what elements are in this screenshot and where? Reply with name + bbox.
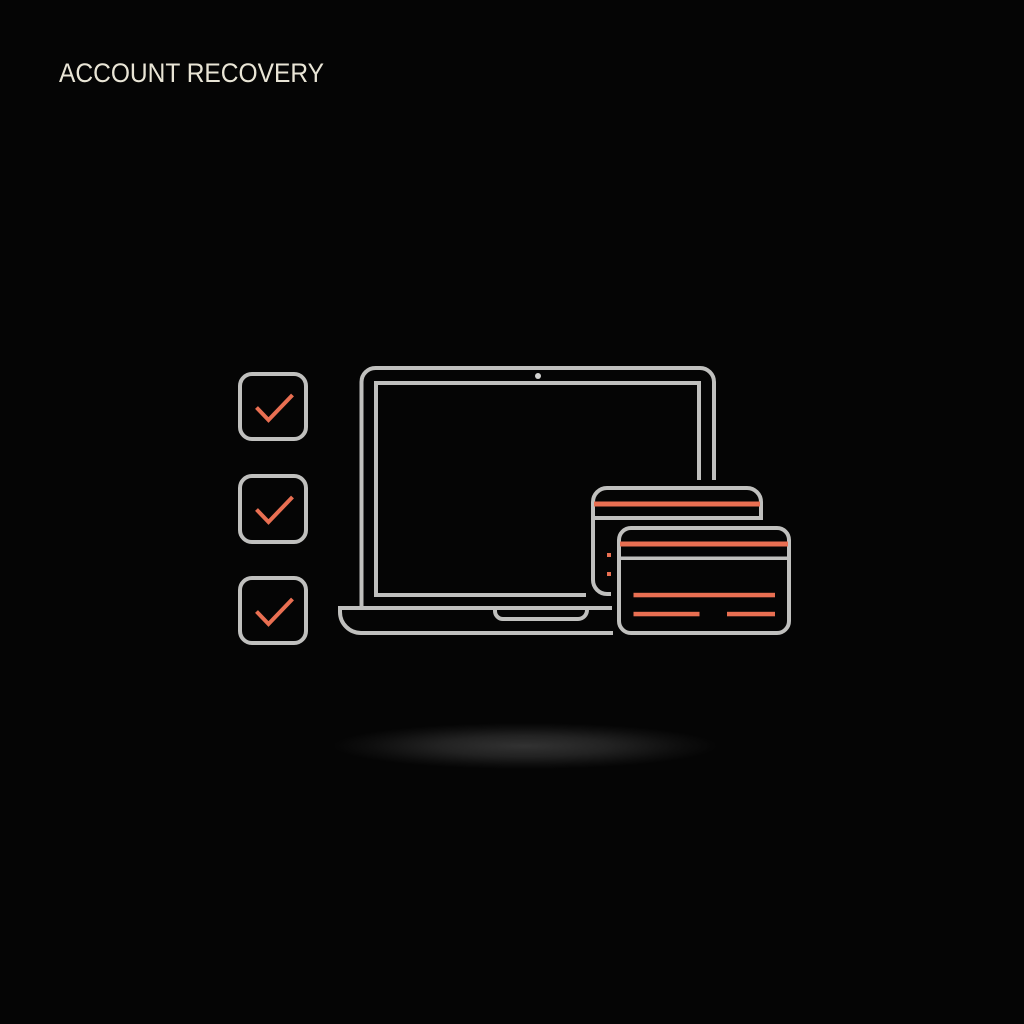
front card bbox=[619, 528, 789, 633]
floor shadow glow bbox=[333, 723, 717, 769]
checkbox 1 bbox=[240, 374, 306, 439]
back card stripe bbox=[594, 502, 760, 506]
camera bbox=[535, 373, 541, 379]
checklist bbox=[240, 374, 306, 643]
front card divider bbox=[620, 556, 788, 560]
checkbox 2 bbox=[240, 476, 306, 542]
front card stripe bbox=[620, 542, 788, 546]
back card dots bbox=[607, 553, 611, 557]
trackpad notch bbox=[495, 608, 587, 619]
back card bbox=[593, 488, 761, 594]
laptop screen bbox=[376, 383, 699, 595]
front card text lines bbox=[634, 593, 775, 616]
laptop base bbox=[340, 608, 613, 633]
title: ACCOUNT RECOVERY bbox=[59, 58, 324, 88]
checkbox 3 bbox=[240, 578, 306, 643]
laptop bbox=[340, 368, 714, 633]
laptop lid outer bbox=[362, 368, 714, 608]
